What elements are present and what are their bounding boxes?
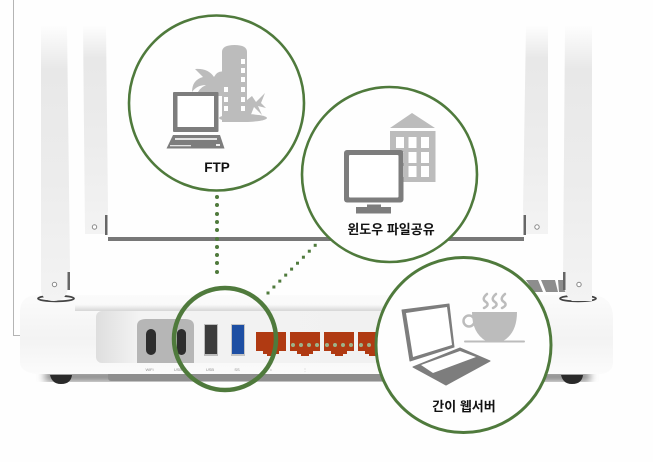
rear left antenna hinge xyxy=(92,225,97,229)
callout: simple web server xyxy=(376,258,551,432)
USB 3.0 port xyxy=(231,324,245,356)
highlight ring around USB ports xyxy=(174,288,276,390)
port LEDs xyxy=(291,343,371,347)
port labels: WiFi xyxy=(146,367,154,372)
rear antennas xyxy=(83,25,548,235)
vents xyxy=(526,280,567,292)
icon: laptop xyxy=(166,92,224,148)
port panel xyxy=(96,311,456,363)
callout: FTP xyxy=(129,16,304,190)
icon: monitor xyxy=(344,150,404,214)
icon: coffee cup xyxy=(464,294,525,342)
dotted connector to file sharing xyxy=(266,244,317,294)
icon: notebook xyxy=(402,304,490,385)
callout: Windows file sharing xyxy=(302,87,477,262)
USB 2.0 port xyxy=(204,324,218,356)
port labels: USB xyxy=(174,367,182,372)
front right antenna xyxy=(563,25,592,301)
label: Windows file sharing: 윈도우 파일공유 xyxy=(347,222,435,237)
port labels: ⋮ xyxy=(303,367,307,372)
power switches xyxy=(137,319,194,363)
bottom bar xyxy=(108,372,528,381)
front left antenna xyxy=(41,25,70,301)
ethernet ports xyxy=(256,332,388,356)
label: simple web server: 간이 웹서버 xyxy=(432,399,496,414)
feet xyxy=(50,375,583,384)
port labels: SS xyxy=(234,367,240,372)
port labels xyxy=(146,367,307,372)
shaded strip above panel xyxy=(75,305,545,311)
rear edge bar xyxy=(108,237,524,241)
dotted connector to FTP xyxy=(215,195,219,274)
label: FTP: FTP xyxy=(204,160,230,175)
antenna bases xyxy=(38,296,596,301)
frame line at left xyxy=(14,0,22,336)
router xyxy=(20,25,613,384)
rear right antenna hinge xyxy=(535,225,539,229)
shadow below router xyxy=(45,372,590,381)
port labels: USB xyxy=(206,367,214,372)
icon: building xyxy=(390,113,436,182)
port labels: • xyxy=(270,367,272,372)
icon: tower with palm trees xyxy=(192,45,267,122)
router body xyxy=(20,295,613,374)
